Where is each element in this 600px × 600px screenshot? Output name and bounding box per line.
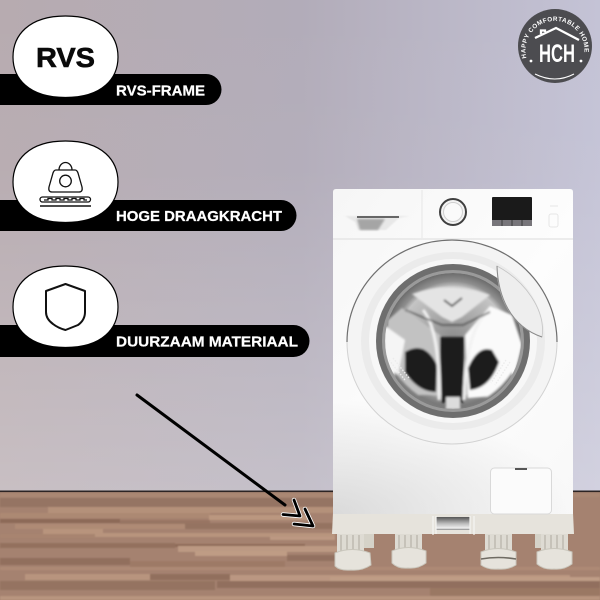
logo smile <box>535 74 574 79</box>
label bar <box>0 325 310 357</box>
foot front left <box>335 534 371 570</box>
label bar <box>0 200 296 231</box>
logo hearts <box>530 60 582 62</box>
drum <box>376 264 530 418</box>
logo: happy comfortable home <box>518 9 592 83</box>
washing machine stand <box>332 513 574 570</box>
label text: DUURZAAM MATERIAAL <box>116 334 298 350</box>
washing machine <box>333 189 573 514</box>
door <box>347 240 557 444</box>
icon: weight on mat <box>40 163 91 206</box>
logo house roof <box>535 28 579 40</box>
filter access panel <box>490 468 552 514</box>
wooden floor <box>0 490 600 600</box>
bubble <box>13 16 118 98</box>
rear feet <box>360 534 549 548</box>
logo monogram: HCH <box>539 40 575 68</box>
bubble <box>13 266 118 348</box>
feature: hoge draagkracht <box>0 141 296 231</box>
foot front right <box>537 534 572 569</box>
lower body shading <box>333 400 573 514</box>
bubble <box>13 141 118 222</box>
stand frame <box>332 513 574 535</box>
label text: HOGE DRAAGKRACHT <box>116 208 282 225</box>
control panel <box>333 190 573 239</box>
feature: RVS-frame <box>0 16 222 105</box>
logo ring text: HAPPY COMFORTABLE HOME <box>521 16 589 58</box>
display <box>492 197 532 226</box>
label text: RVS-FRAME <box>116 82 205 100</box>
door handle flap <box>497 266 542 337</box>
foot front centre-left <box>392 534 426 568</box>
label bar <box>0 74 222 105</box>
drum vent holes <box>389 358 510 385</box>
feature: duurzaam materiaal <box>0 266 310 357</box>
bubble text: RVS <box>36 42 95 73</box>
detergent drawer handle <box>345 216 410 230</box>
icon: shield <box>46 284 85 330</box>
foot front centre-right <box>481 534 516 569</box>
machine body <box>333 189 573 514</box>
control buttons <box>549 206 558 227</box>
program dial <box>440 199 466 225</box>
arrow pointing at stand <box>137 395 313 526</box>
